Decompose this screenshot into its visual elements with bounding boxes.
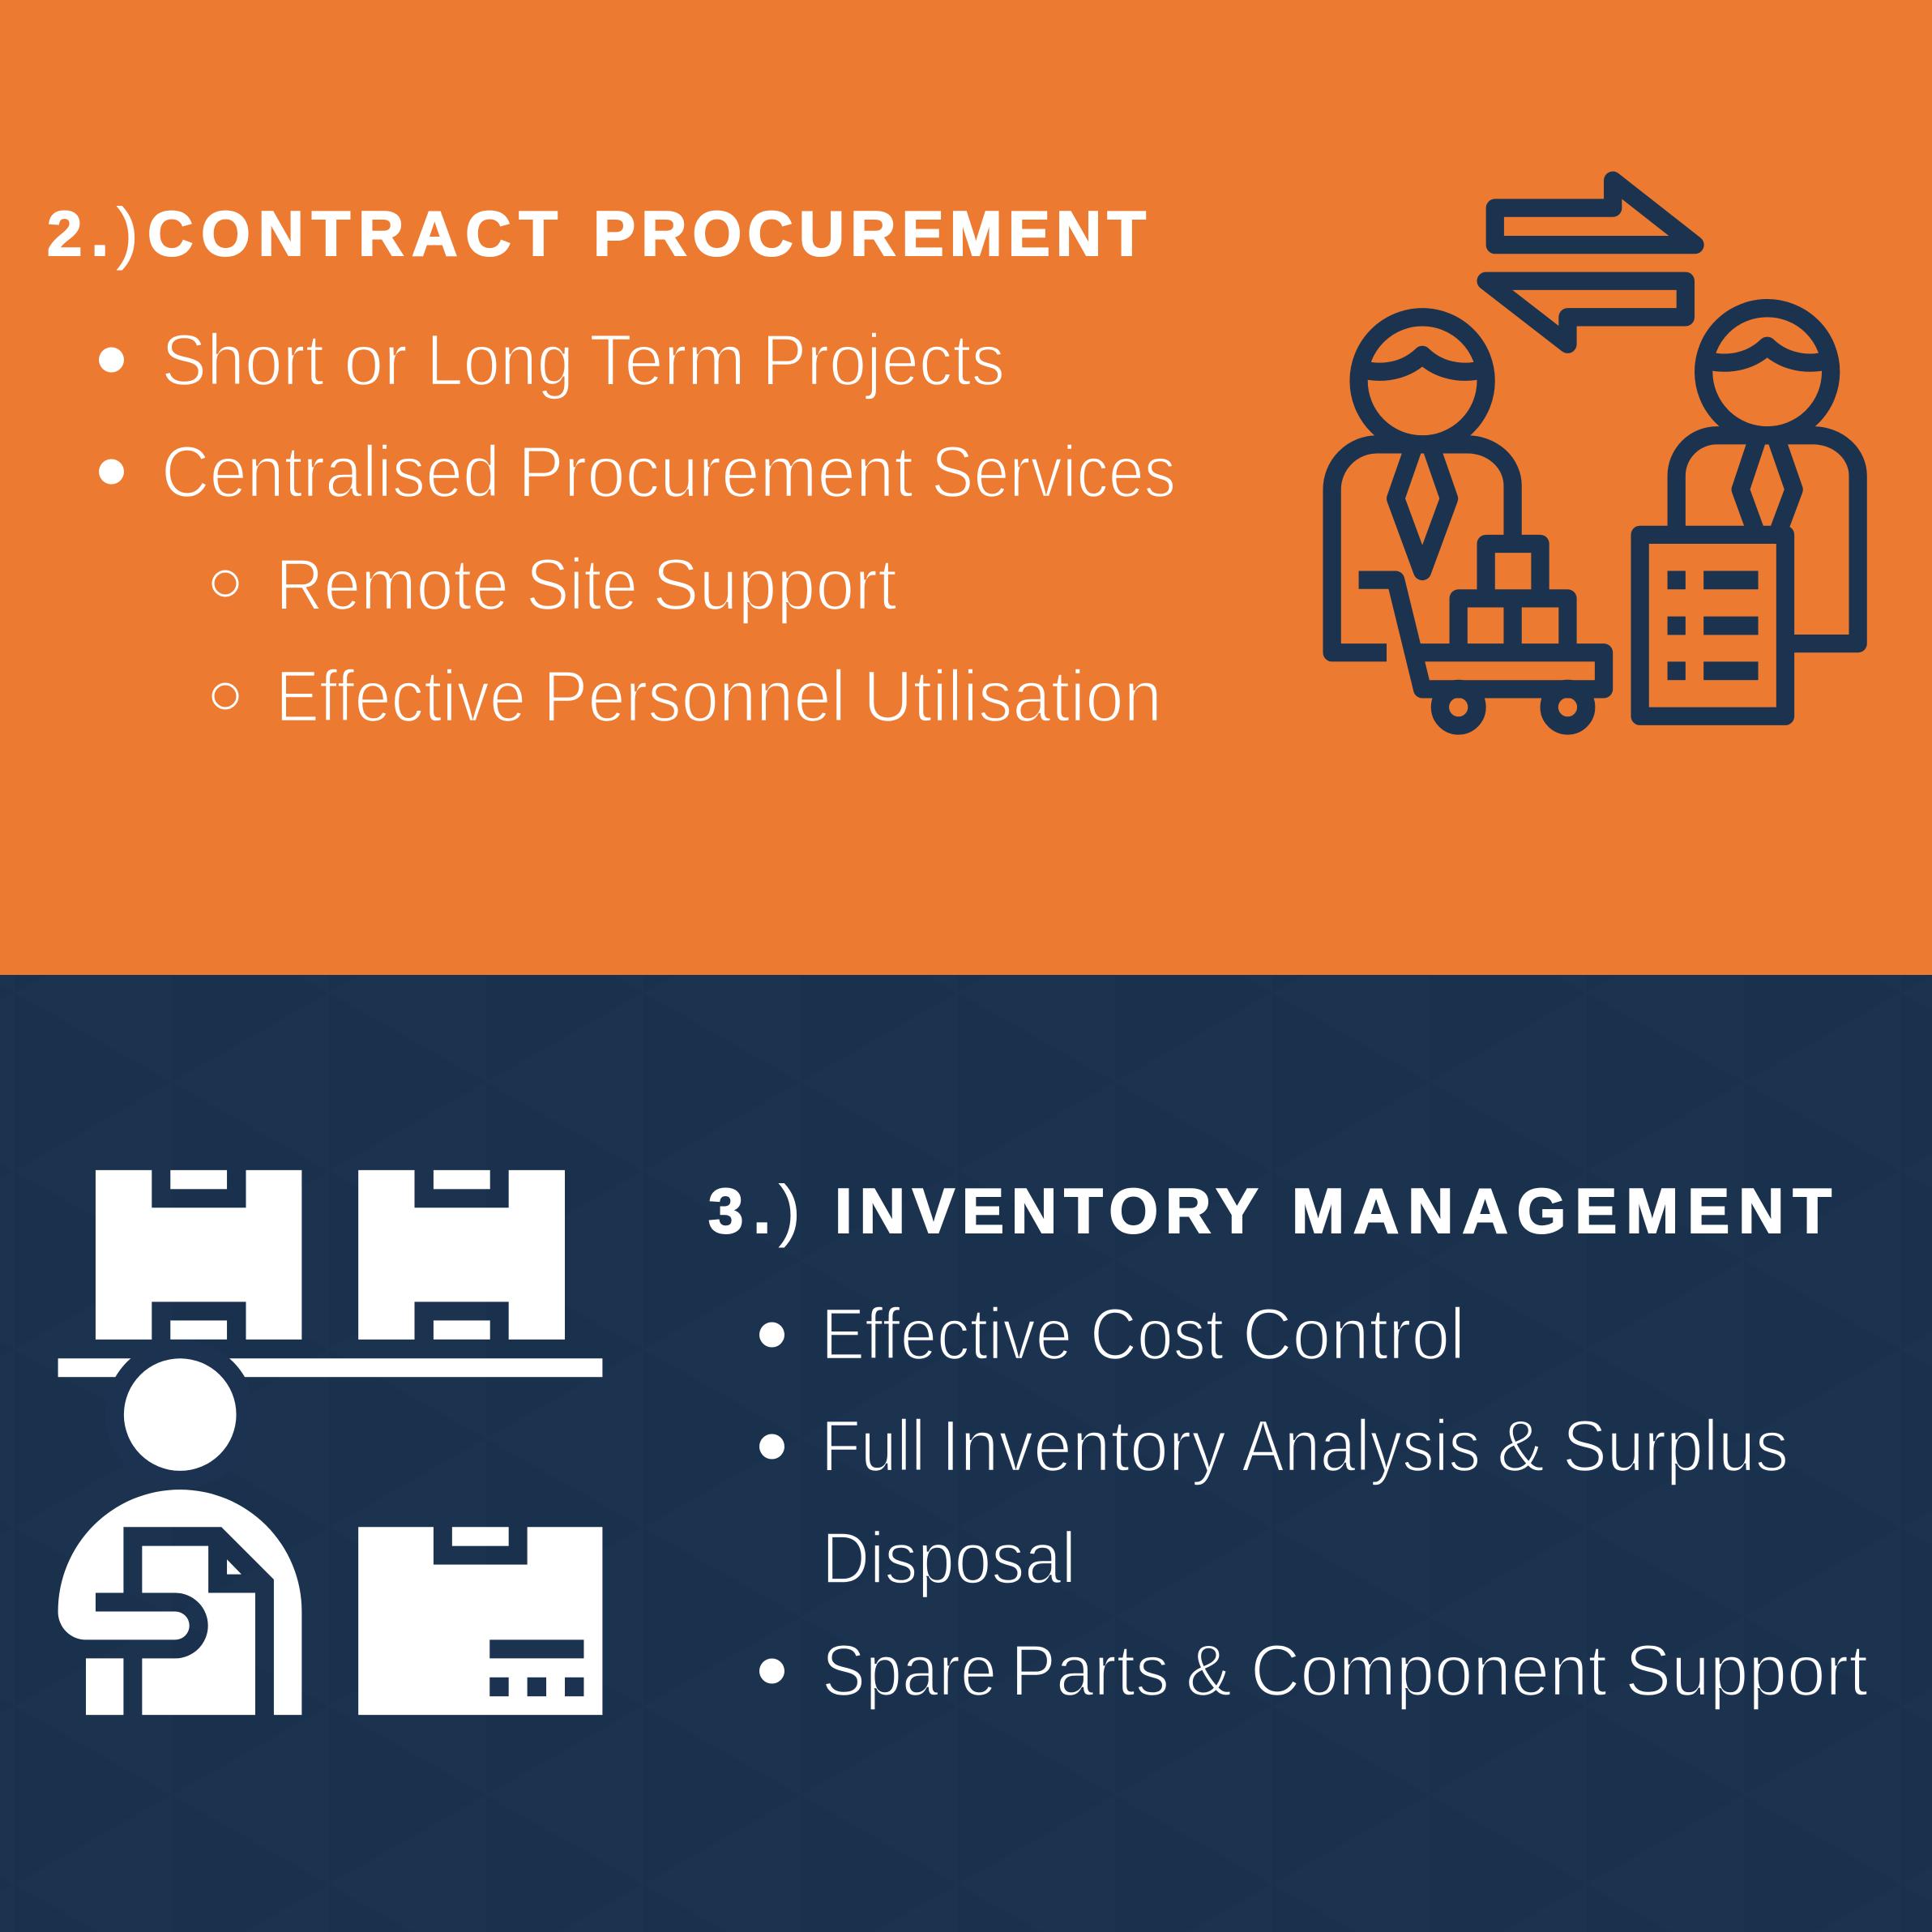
heading: inventory management: MANAGEMENT — [1292, 1175, 1832, 1246]
sub-list item: Utilisation — [863, 656, 1162, 737]
list item: Control — [1242, 1294, 1465, 1375]
arrow: right — [1495, 181, 1695, 245]
list item, wrapped over two lines: & — [1497, 1406, 1545, 1487]
list item: Cost — [1090, 1294, 1224, 1375]
list item: Short — [161, 320, 324, 401]
worker body — [58, 1490, 301, 1715]
sub-bullet — [213, 571, 237, 596]
panel: inventory management — [0, 975, 1932, 1932]
worker leg — [86, 1658, 123, 1715]
box on floor — [358, 1527, 602, 1715]
heading: inventory management: 3. — [708, 1175, 780, 1246]
bullet — [759, 1434, 784, 1459]
sub-list item: Effective — [276, 656, 526, 737]
list item: & — [1186, 1631, 1232, 1712]
list item: Term — [589, 320, 746, 401]
list item: Procurement — [518, 432, 913, 513]
bullet list: procurement services — [99, 320, 1176, 737]
arrow: left — [1486, 281, 1686, 344]
list item: Spare — [822, 1631, 997, 1712]
heading: inventory management: ) — [778, 1172, 801, 1249]
heading: contract procurement: ) — [116, 194, 139, 271]
panel: contract procurement — [0, 0, 1932, 975]
list item, wrapped over two lines: Full — [821, 1406, 925, 1487]
list item: Component — [1250, 1631, 1607, 1712]
bullet list: inventory services — [759, 1294, 1868, 1712]
right person — [1677, 308, 1858, 643]
left person — [1332, 317, 1513, 652]
orange background — [0, 0, 1932, 975]
list item: Centralised — [161, 432, 500, 513]
sub-bullet — [213, 684, 237, 708]
list item, wrapped over two lines: Inventory — [941, 1406, 1226, 1487]
list item: Parts — [1011, 1631, 1169, 1712]
list item: Projects — [762, 320, 1005, 401]
navy patterned background — [0, 975, 1932, 1932]
heading: contract procurement: PROCUREMENT — [593, 198, 1146, 269]
sub-list item: Support — [652, 545, 897, 626]
list item: Services — [931, 432, 1176, 513]
box on shelf, right — [358, 1170, 565, 1340]
heading: contract procurement: CONTRACT — [147, 198, 558, 269]
shelf — [58, 1340, 602, 1490]
icon: warehouse worker with boxes on a shelf — [58, 1170, 602, 1715]
bullet — [99, 347, 124, 373]
heading: contract procurement: 2. — [47, 198, 118, 269]
bullet — [99, 459, 124, 485]
list item, wrapped over two lines: Disposal — [822, 1519, 1076, 1600]
bullet — [759, 1323, 784, 1347]
bullet — [759, 1658, 784, 1684]
list item, wrapped over two lines: Surplus — [1562, 1406, 1789, 1487]
sub-list item: Personnel — [543, 656, 846, 737]
document — [142, 1546, 255, 1715]
cart with boxes — [1359, 544, 1604, 725]
box on shelf, left — [96, 1170, 301, 1340]
list item: Effective — [821, 1294, 1072, 1375]
list item: or — [344, 320, 408, 401]
icon: two businessmen exchanging goods and documents — [1332, 181, 1858, 725]
sub-list item: Remote — [276, 545, 509, 626]
heading: inventory management: INVENTORY — [835, 1175, 1257, 1246]
sub-list item: Site — [526, 545, 638, 626]
list item, wrapped over two lines: Analysis — [1242, 1406, 1481, 1487]
list item: Long — [426, 320, 574, 401]
list item: Support — [1625, 1631, 1868, 1712]
worker head — [124, 1358, 237, 1471]
clipboard — [1640, 535, 1785, 716]
